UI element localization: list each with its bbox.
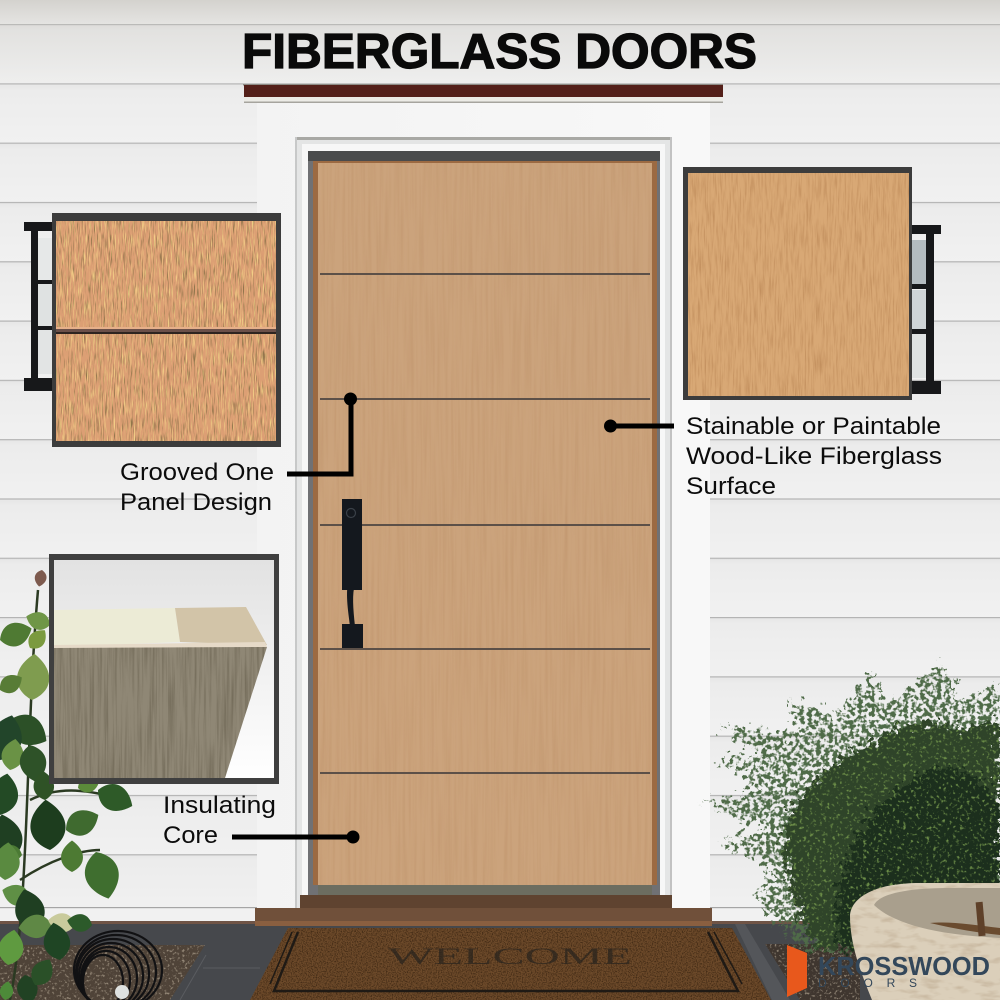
leader line: surface bbox=[604, 420, 674, 432]
label: insulating core: Core bbox=[163, 822, 218, 849]
label: stainable or paintable surface bbox=[686, 413, 942, 500]
inset groove bbox=[56, 327, 276, 334]
black wire coil planter bbox=[74, 931, 162, 1000]
logo: Krosswood Doors: KROSSWOOD bbox=[818, 951, 990, 981]
left wall lantern bbox=[24, 222, 54, 391]
wood stile top bbox=[175, 607, 267, 645]
label: grooved one panel design: Panel Design bbox=[120, 489, 272, 516]
label: insulating core bbox=[163, 792, 276, 849]
title: FIBERGLASS DOORS bbox=[242, 25, 757, 79]
inset: grooved panel close-up bbox=[52, 213, 281, 447]
right wall lantern bbox=[908, 225, 941, 394]
leader line: core bbox=[232, 830, 360, 844]
shrub at right bbox=[702, 663, 1000, 950]
shrub foliage mass bbox=[784, 722, 1000, 950]
foam core top bbox=[54, 608, 180, 647]
label: grooved one panel design: Grooved One bbox=[120, 459, 274, 486]
left flowering plant bbox=[0, 569, 138, 1000]
label: stainable or paintable surface: Surface bbox=[686, 473, 776, 500]
logo icon: orange door bbox=[787, 945, 807, 997]
label: stainable or paintable surface: Stainable or Paintable bbox=[686, 413, 941, 440]
stone planter bbox=[850, 883, 1000, 1000]
fiberglass skin side bbox=[54, 647, 267, 778]
door handle set bbox=[342, 499, 363, 648]
door: stained fiberglass slab with grooves bbox=[313, 161, 657, 895]
wooden door step bbox=[255, 895, 712, 926]
inset: wood-like surface close-up bbox=[683, 167, 912, 400]
leader line: grooved panel bbox=[287, 392, 357, 474]
lintel: dark red wood cap bbox=[244, 85, 723, 97]
label: stainable or paintable surface: Wood-Like Fiberglass bbox=[686, 443, 942, 470]
door grooves bbox=[320, 273, 650, 774]
inset: insulating core cross-section bbox=[49, 554, 279, 784]
ground: dark paving and gravel bbox=[0, 924, 1000, 1000]
shrub sparse outer sprigs bbox=[702, 663, 1000, 950]
logo: Krosswood Doors bbox=[787, 945, 990, 997]
label: grooved one panel design bbox=[120, 459, 274, 516]
logo: Krosswood Doors: DOORS bbox=[818, 976, 917, 990]
welcome doormat bbox=[250, 928, 771, 1000]
mat lettering: WELCOME bbox=[388, 944, 632, 969]
label: insulating core: Insulating bbox=[163, 792, 276, 819]
door trim and lintel bbox=[243, 84, 723, 912]
